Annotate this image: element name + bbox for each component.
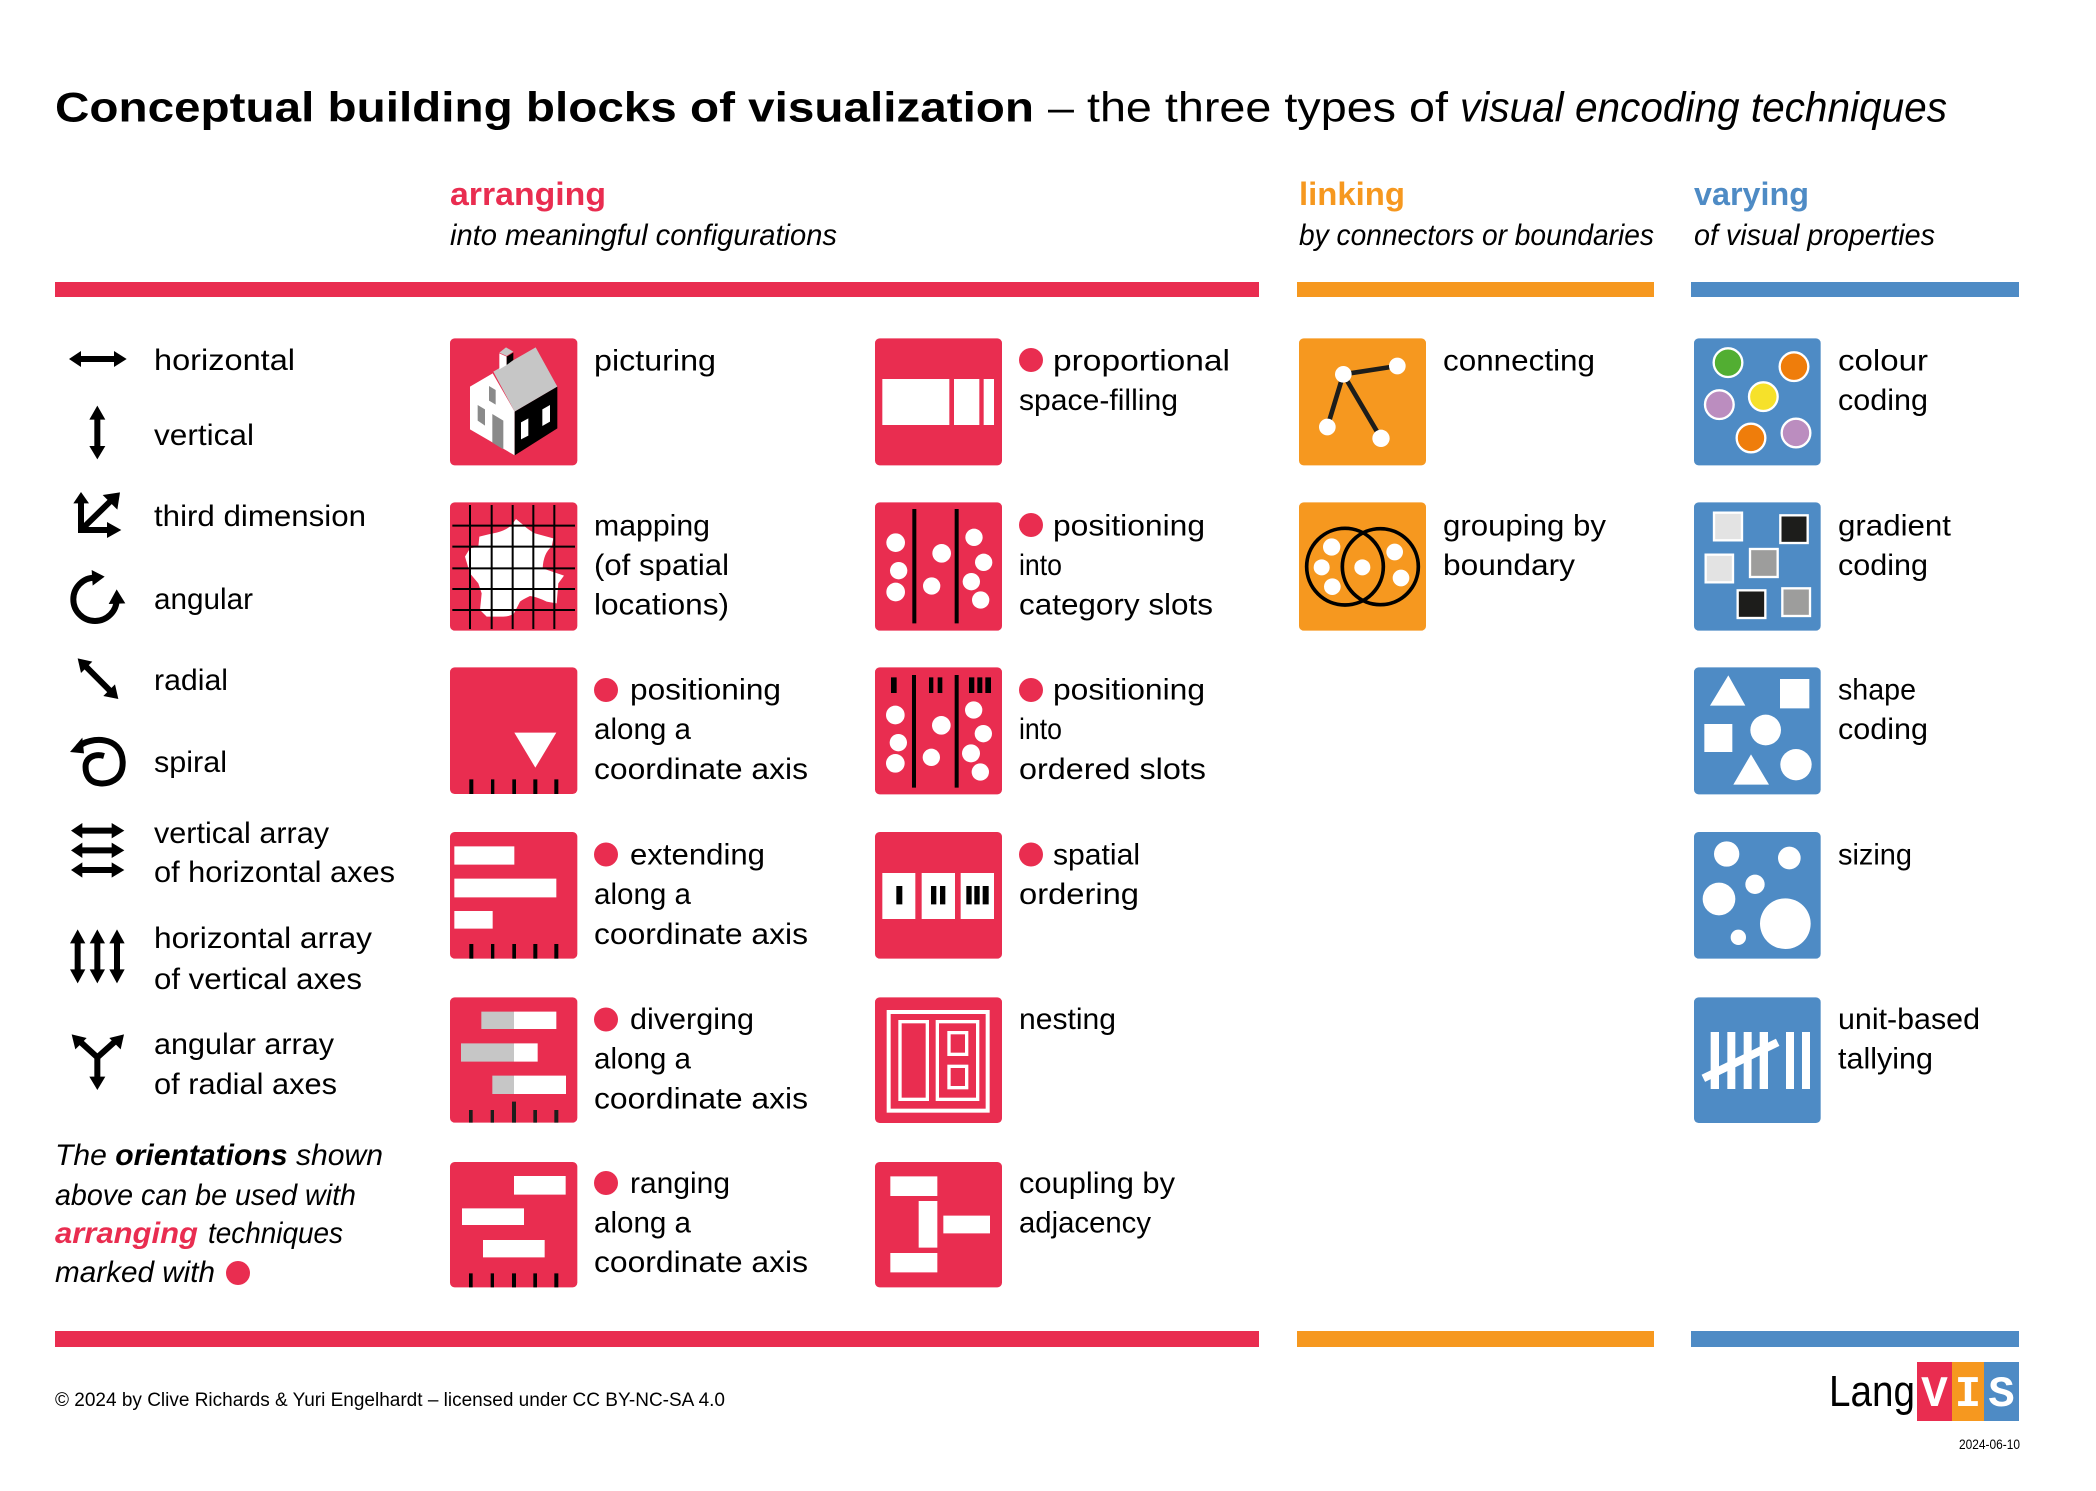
technique: coupling by adjacency: coupling by	[1019, 1167, 1175, 1200]
logo: LangVIS: S	[1988, 1370, 2015, 1420]
icon and label: angular	[73, 570, 253, 621]
icon and label: horizontal	[69, 344, 295, 377]
panel: arranging techniques	[450, 338, 1230, 1287]
heading: arranging: into meaningful configurations	[450, 219, 837, 252]
title: Conceptual building blocks of visualization	[55, 84, 1034, 130]
technique: grouping by boundary: grouping by	[1443, 510, 1606, 542]
technique: extending along a coordinate axis: along a	[594, 878, 691, 911]
technique: sizing	[1694, 832, 1912, 959]
technique: positioning into category slots: category slots	[1019, 588, 1213, 622]
note: orientations: techniques	[208, 1217, 343, 1250]
technique: mapping: mapping	[594, 510, 710, 542]
date: 2024-06-10	[1959, 1436, 2020, 1452]
technique: spatial ordering: ordering	[1019, 878, 1139, 911]
technique: spatial ordering: spatial	[1053, 838, 1140, 872]
technique: ranging along a coordinate axis: along a	[594, 1206, 691, 1240]
panel: varying techniques	[1694, 338, 1980, 1123]
technique: extending along a coordinate axis	[450, 832, 808, 959]
icon and label: vertical array of horizontal axes: of horizontal axes	[154, 856, 395, 889]
technique: gradient coding: coding	[1838, 549, 1928, 582]
icon and label: vertical array of horizontal axes	[71, 817, 395, 889]
icon and label: angular: angular	[154, 583, 253, 616]
logo: LangVIS: V	[1921, 1370, 1948, 1420]
technique: ranging along a coordinate axis	[450, 1162, 808, 1287]
technique: diverging along a coordinate axis: diverging	[630, 1003, 754, 1036]
technique: positioning into ordered slots: into	[1019, 713, 1062, 746]
icon and label: vertical array of horizontal axes: vertical array	[154, 817, 329, 850]
technique: positioning along a coordinate axis	[450, 667, 808, 794]
technique: colour coding: colour	[1838, 344, 1928, 378]
icon and label: third dimension: third dimension	[154, 500, 366, 533]
note: orientations: arranging	[55, 1217, 198, 1250]
technique: unit-based tallying: unit-based	[1838, 1003, 1980, 1036]
icon and label: horizontal array of vertical axes	[70, 922, 372, 996]
technique: positioning into ordered slots	[875, 667, 1206, 794]
heading: linking	[1299, 176, 1654, 252]
technique: colour coding	[1694, 338, 1928, 465]
icon and label: radial	[78, 658, 228, 699]
note: orientations: above can be used with	[55, 1179, 356, 1212]
icon and label: angular array of radial axes	[72, 1028, 337, 1101]
technique: gradient coding: gradient	[1838, 510, 1952, 542]
panel: linking techniques	[1299, 338, 1606, 631]
technique: positioning into category slots: positioning	[1053, 510, 1205, 542]
technique: shape coding: coding	[1838, 713, 1928, 746]
technique: diverging along a coordinate axis: coordinate axis	[594, 1082, 808, 1116]
heading: arranging	[450, 176, 837, 252]
technique: unit-based tallying: tallying	[1838, 1042, 1933, 1076]
footer credit: © 2024 by Clive Richards & Yuri Engelhardt – licensed under CC BY-NC-SA 4.0	[55, 1390, 725, 1411]
technique: unit-based tallying	[1694, 997, 1980, 1123]
logo: LangVIS	[1829, 1362, 2019, 1421]
technique: diverging along a coordinate axis: along a	[594, 1042, 691, 1076]
technique: shape coding	[1694, 667, 1928, 794]
technique: colour coding: coding	[1838, 384, 1928, 417]
technique: nesting	[875, 997, 1116, 1123]
icon and label: horizontal array of vertical axes: horizontal array	[154, 922, 372, 955]
heading: varying	[1694, 176, 1935, 252]
note: orientations: The orientations shown	[55, 1139, 383, 1172]
technique: sizing: sizing	[1838, 838, 1912, 872]
technique: positioning into ordered slots: positioning	[1053, 674, 1205, 706]
technique: diverging along a coordinate axis	[450, 997, 808, 1123]
technique: shape coding: shape	[1838, 674, 1916, 706]
technique: extending along a coordinate axis: coordinate axis	[594, 918, 808, 951]
heading: varying: of visual properties	[1694, 219, 1935, 252]
icon and label: vertical: vertical	[154, 419, 254, 452]
technique: proportional space-filling: proportional	[1053, 344, 1230, 378]
title: – the three types of	[1048, 84, 1448, 130]
technique: picturing: picturing	[594, 344, 716, 378]
heading: arranging: arranging	[450, 176, 606, 212]
panel: orientations	[69, 344, 395, 1101]
note: orientations: marked with	[55, 1256, 215, 1289]
technique: positioning along a coordinate axis: coordinate axis	[594, 753, 808, 786]
technique: spatial ordering	[875, 832, 1140, 959]
heading: linking: by connectors or boundaries	[1299, 219, 1654, 252]
title: visual encoding techniques	[1460, 84, 1947, 130]
technique: grouping by boundary: boundary	[1443, 549, 1575, 582]
icon and label: horizontal array of vertical axes: of vertical axes	[154, 963, 362, 996]
technique: nesting: nesting	[1019, 1003, 1116, 1036]
icon and label: third dimension	[73, 492, 366, 538]
technique: coupling by adjacency	[875, 1162, 1175, 1287]
technique: proportional space-filling: space-filling	[1019, 384, 1178, 417]
heading: varying: varying	[1694, 176, 1809, 212]
technique: positioning along a coordinate axis: along a	[594, 713, 691, 746]
icon and label: spiral	[70, 738, 227, 783]
icon and label: vertical	[89, 406, 254, 459]
icon and label: horizontal: horizontal	[154, 344, 295, 377]
technique: mapping: locations)	[594, 588, 729, 622]
heading: linking: linking	[1299, 176, 1405, 212]
technique: positioning into category slots	[875, 502, 1213, 631]
technique: connecting	[1299, 338, 1595, 465]
technique: coupling by adjacency: adjacency	[1019, 1206, 1151, 1240]
title	[55, 84, 1947, 130]
technique: gradient coding	[1694, 502, 1952, 631]
technique: grouping by boundary	[1299, 502, 1606, 631]
technique: positioning into category slots: into	[1019, 549, 1062, 582]
technique: connecting: connecting	[1443, 344, 1595, 378]
technique: picturing	[450, 338, 716, 465]
icon and label: angular array of radial axes: of radial axes	[154, 1068, 337, 1101]
technique: ranging along a coordinate axis: ranging	[630, 1167, 730, 1200]
technique: mapping	[450, 502, 729, 631]
icon and label: angular array of radial axes: angular array	[154, 1028, 334, 1061]
technique: extending along a coordinate axis: extending	[630, 838, 765, 872]
technique: positioning along a coordinate axis: positioning	[630, 674, 781, 706]
technique: positioning into ordered slots: ordered slots	[1019, 753, 1206, 786]
technique: mapping: (of spatial	[594, 549, 729, 582]
icon and label: spiral: spiral	[154, 746, 227, 779]
logo: LangVIS: Lang	[1829, 1367, 1915, 1416]
note: orientations	[55, 1139, 383, 1289]
logo: LangVIS: I	[1955, 1370, 1981, 1420]
technique: proportional space-filling	[875, 338, 1230, 465]
technique: ranging along a coordinate axis: coordinate axis	[594, 1246, 808, 1279]
icon and label: radial: radial	[154, 664, 228, 697]
